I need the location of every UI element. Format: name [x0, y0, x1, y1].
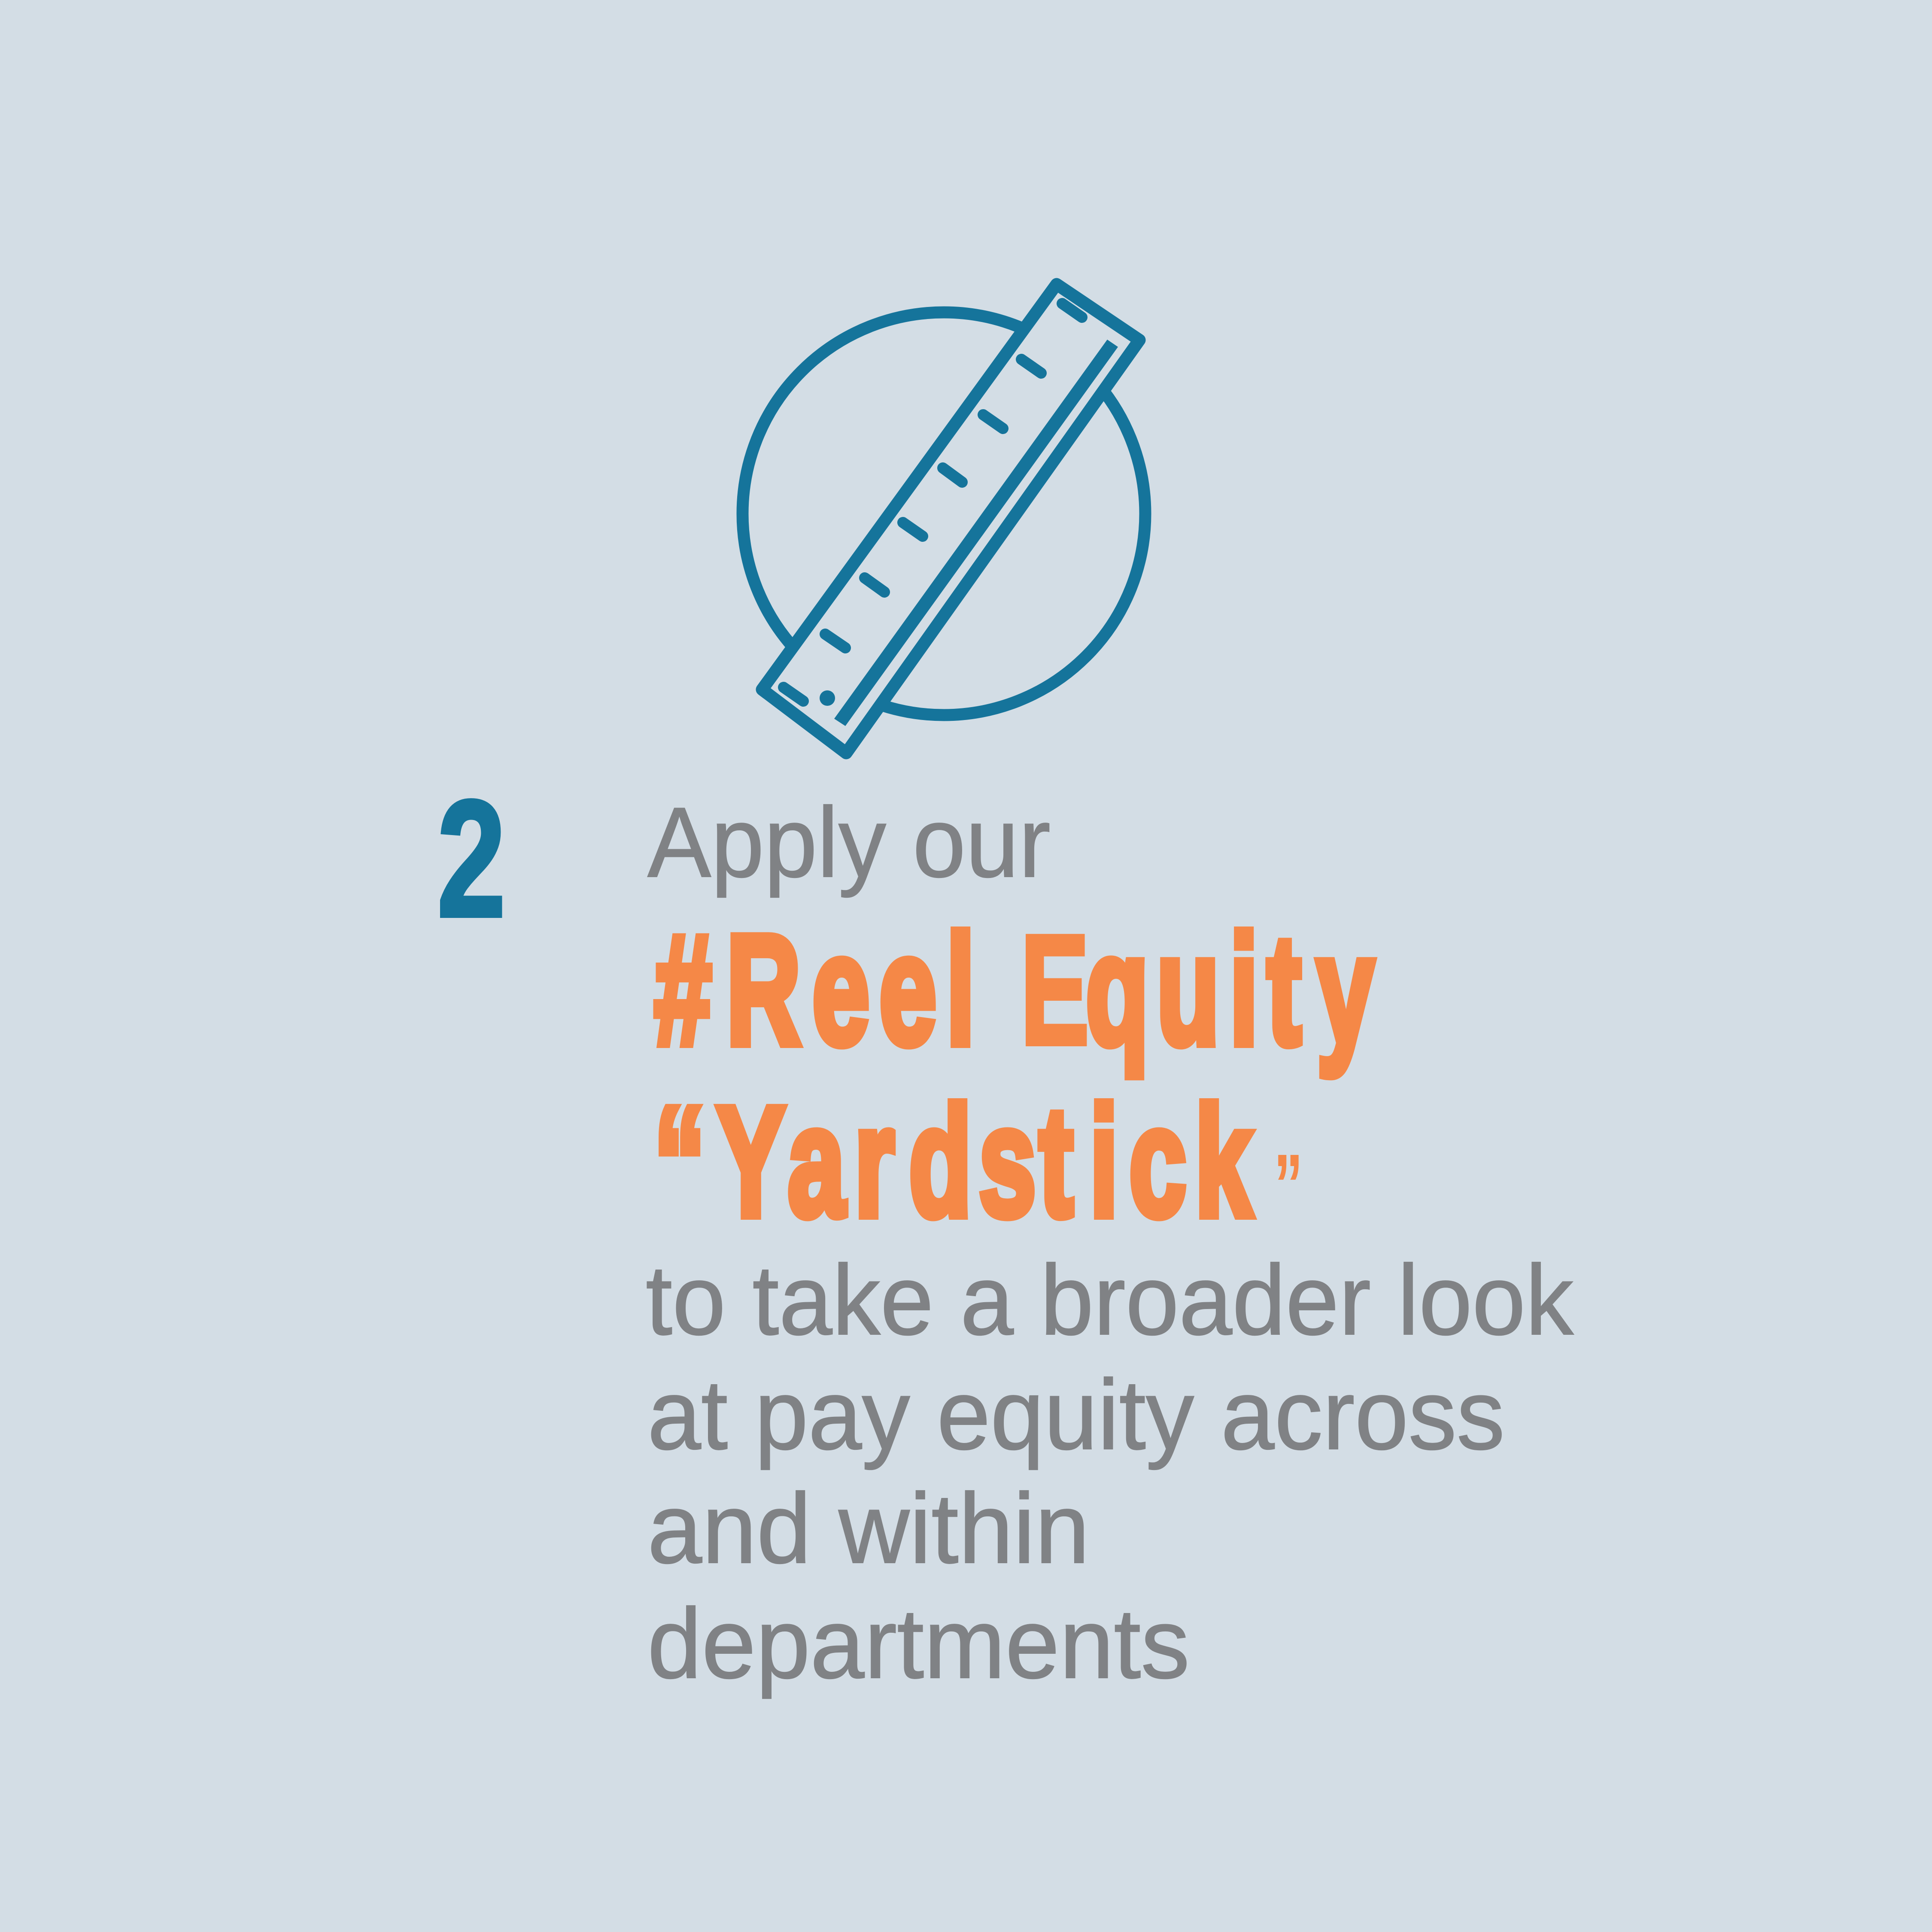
icon part: ruler outline [762, 284, 1139, 753]
heading line 1: #Reel [654, 903, 975, 1077]
heading line 2: “Yardstick [654, 1075, 1252, 1249]
icon part: ruler tick marks [784, 304, 1082, 701]
heading line 1: E [1021, 903, 1089, 1077]
body line 4: departments [647, 1588, 1190, 1699]
icon part: ruler inner bar [834, 340, 1118, 726]
heading line 2: ” [1274, 1136, 1303, 1234]
step number: 2 [437, 766, 506, 952]
heading: Reel Equity Yardstick [654, 903, 1375, 1249]
icon part: circle [743, 313, 1145, 715]
text: body description [646, 1245, 1574, 1699]
body line 1: to take a broader look [646, 1245, 1574, 1356]
icon part: ruler dot [820, 690, 835, 706]
body line 3: and within [647, 1473, 1090, 1584]
text: intro line: Apply our [647, 787, 1051, 898]
icon: ruler over circle [743, 284, 1145, 753]
heading line 1: quity [1086, 903, 1375, 1078]
body line 2: at pay equity across [647, 1359, 1505, 1470]
